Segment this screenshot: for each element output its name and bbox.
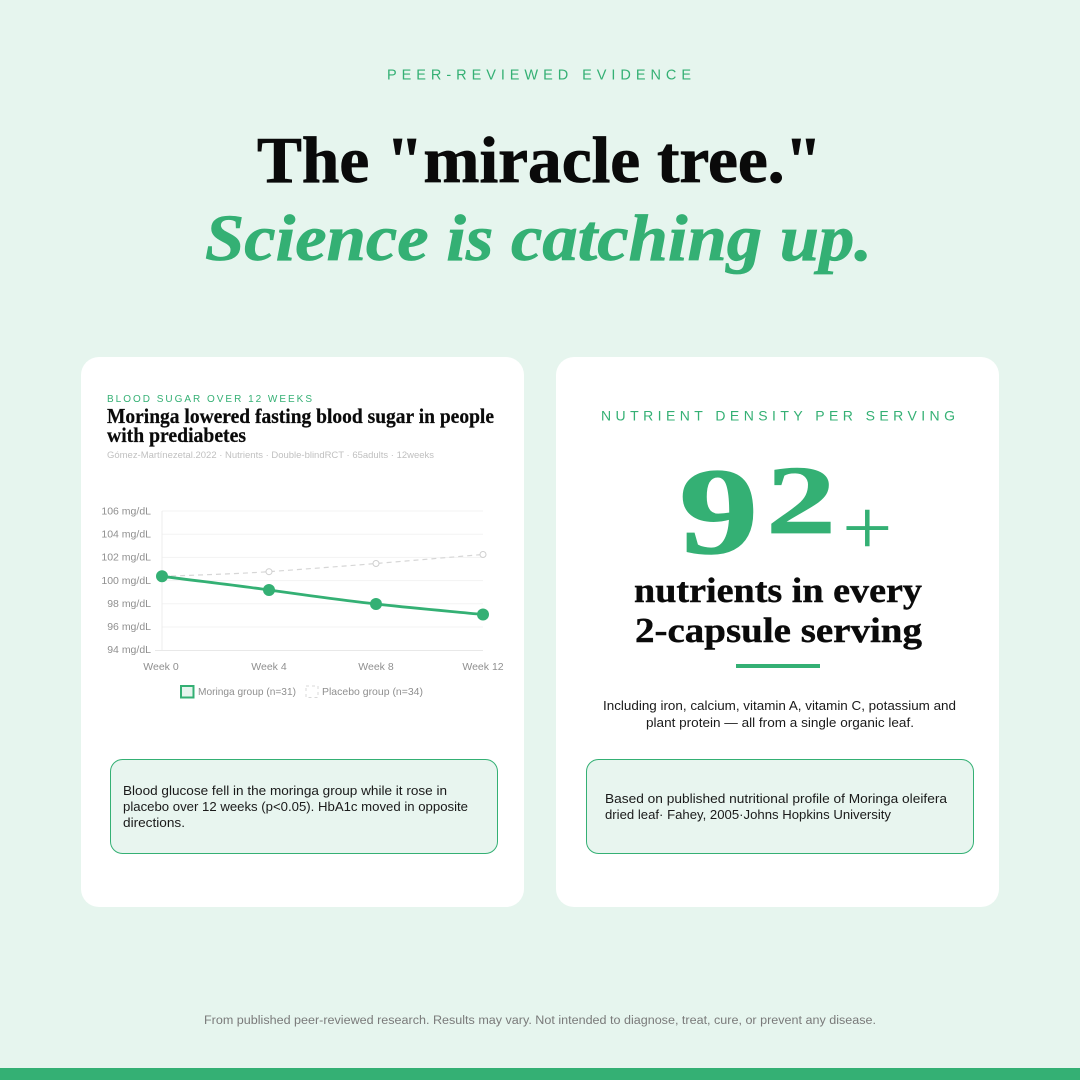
title: Science is catching up. — [205, 202, 872, 275]
y axis labels: 96 mg/dL — [107, 621, 151, 633]
study citation: Gómez-Martínezetal.2022 · Nutrients · Double-blindRCT · 65adults · 12weeks — [107, 450, 434, 461]
y axis labels: 106 mg/dL — [101, 506, 151, 518]
y axis labels: 98 mg/dL — [107, 598, 151, 610]
big number 92+: + — [842, 485, 893, 572]
accent divider — [736, 664, 820, 668]
nutrient list text: plant protein — all from a single organic leaf. — [646, 716, 914, 730]
stat description: nutrients in every — [634, 571, 923, 610]
x axis labels — [143, 661, 504, 673]
big number 92+: 9 — [679, 442, 758, 580]
placebo line — [162, 552, 486, 576]
panel: nutrient density card — [556, 357, 999, 907]
moringa line — [156, 570, 489, 620]
x axis labels: Week 12 — [462, 661, 504, 673]
x axis labels: Week 4 — [251, 661, 287, 673]
footer disclaimer: From published peer-reviewed research. Results may vary. Not intended to diagnose, treat, cure, or prevent any disease. — [204, 1015, 876, 1027]
callout: source — [586, 760, 974, 854]
title — [205, 124, 872, 275]
title: The "miracle tree." — [257, 124, 822, 197]
panel heading: with prediabetes — [107, 423, 246, 447]
x axis labels: Week 8 — [358, 661, 394, 673]
callout: source: dried leaf· Fahey, 2005·Johns Hopkins University — [605, 808, 892, 822]
line chart: fasting blood glucose — [101, 506, 504, 698]
panel heading — [107, 404, 494, 447]
y axis labels — [101, 506, 151, 656]
panel heading: Moringa lowered fasting blood sugar in people — [107, 404, 494, 428]
stat description: 2-capsule serving — [635, 611, 923, 650]
eyebrow: peer-reviewed evidence: PEER-REVIEWED EVIDENCE — [387, 68, 691, 84]
y axis labels: 100 mg/dL — [101, 575, 151, 587]
nutrient list text: Including iron, calcium, vitamin A, vitamin C, potassium and — [603, 699, 956, 713]
nutrient list text — [603, 699, 956, 730]
legend — [181, 686, 423, 698]
callout: chart finding: Blood glucose fell in the moringa group while it rose in — [123, 784, 447, 798]
legend: Moringa group (n=31) — [198, 686, 296, 698]
panel eyebrow: BLOOD SUGAR OVER 12 WEEKS — [107, 394, 312, 405]
y axis labels: 94 mg/dL — [107, 644, 151, 656]
y axis labels: 102 mg/dL — [101, 552, 151, 564]
callout: chart finding — [110, 760, 498, 854]
big number 92+: 2 — [766, 446, 836, 555]
y axis labels: 104 mg/dL — [101, 528, 151, 540]
bottom accent bar — [0, 1068, 1080, 1080]
callout: source: Based on published nutritional profile of Moringa oleifera — [605, 792, 947, 806]
panel eyebrow: NUTRIENT DENSITY PER SERVING — [601, 408, 955, 424]
callout: chart finding: directions. — [123, 816, 185, 830]
panel: blood sugar chart card — [81, 357, 524, 907]
big number 92+ — [679, 442, 893, 580]
callout: chart finding: placebo over 12 weeks (p<0.05). HbA1c moved in opposite — [123, 800, 468, 814]
stat description — [634, 571, 923, 650]
legend: Placebo group (n=34) — [322, 686, 423, 698]
x axis labels: Week 0 — [143, 661, 179, 673]
